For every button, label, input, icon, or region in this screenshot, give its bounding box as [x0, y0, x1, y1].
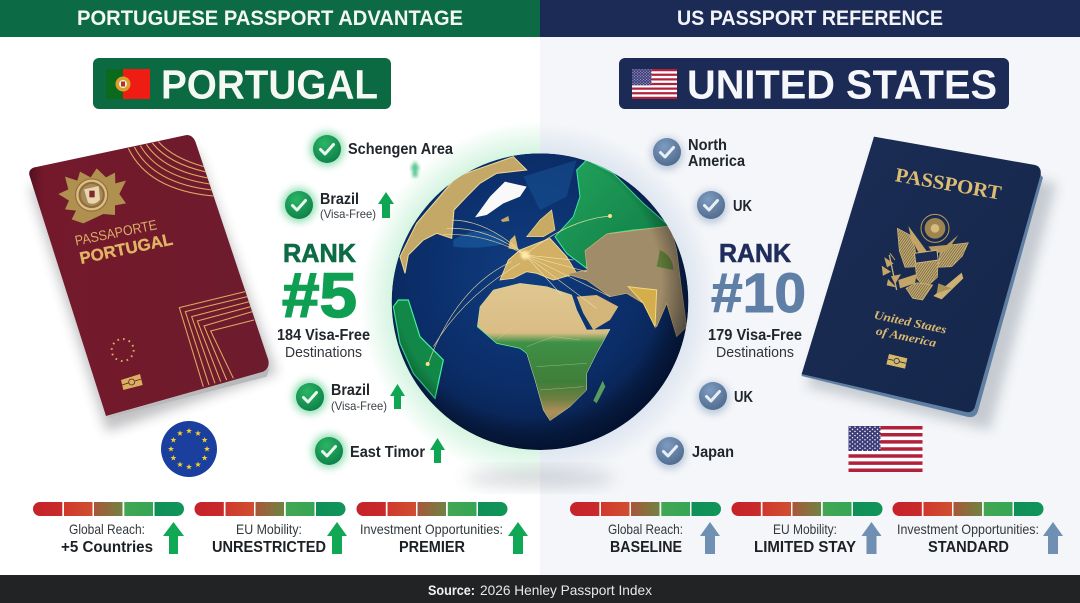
benefit: Schengen Area: Schengen Area [348, 141, 453, 158]
flight arcs [428, 216, 610, 363]
benefit: Brazil visa-free lower: (Visa-Free) [331, 399, 387, 413]
icon: EU flag [161, 421, 217, 477]
icon: biometric chip [121, 374, 143, 390]
benefit: North America [651, 137, 745, 170]
header: Portuguese passport advantage [0, 0, 540, 37]
land: South America [393, 300, 443, 398]
benefit: Brazil visa-free upper: (Visa-Free) [320, 207, 376, 221]
metric: EU Mobility Portugal [194, 502, 347, 556]
passport: Portugal: PORTUGAL [78, 230, 174, 268]
metric: Investment Opportunities US: STANDARD [928, 539, 1009, 556]
rank block: United States: #10 [711, 261, 806, 324]
decorative gold arcs [128, 142, 254, 387]
metric: EU Mobility US [732, 502, 882, 556]
icon: small faded arrow [410, 161, 420, 177]
benefit: Brazil visa-free upper [282, 188, 394, 222]
metric: EU Mobility US: EU Mobility: [773, 521, 837, 537]
icon: coat of arms [58, 168, 126, 223]
land: Europe [500, 238, 577, 280]
icon: EU star ring [112, 339, 134, 361]
benefit: North America: America [688, 153, 745, 170]
metric: Global Reach US: Global Reach: [608, 521, 683, 537]
benefit: Brazil visa-free lower [293, 380, 405, 414]
rank block: Portugal: 184 Visa-Free [277, 327, 370, 344]
benefit: Brazil visa-free upper: Brazil [320, 191, 359, 208]
badge: United States: UNITED STATES [687, 62, 997, 108]
passport: Portugal: PASSAPORTE [73, 216, 158, 249]
badge: Portugal: PORTUGAL [161, 62, 378, 108]
land: Africa [477, 283, 610, 421]
passport: Portugal [29, 135, 277, 432]
metric: EU Mobility Portugal: EU Mobility: [236, 521, 302, 537]
benefit: Japan [654, 437, 734, 469]
icon: biometric chip [886, 354, 907, 369]
benefit: Brazil visa-free lower: Brazil [331, 382, 370, 399]
metric: Investment Opportunities US: Investment Opportunities: [897, 521, 1039, 537]
benefit: UK upper: UK [733, 198, 753, 215]
rank block: Portugal [277, 238, 370, 361]
badge: Portugal [93, 58, 391, 109]
metric: Global Reach Portugal: +5 Countries [61, 539, 153, 556]
metric: Investment Opportunities Portugal: PREMIER [399, 539, 465, 556]
benefit: UK upper [695, 191, 753, 223]
icon: US flag [632, 69, 677, 99]
header: US passport reference: US PASSPORT REFERENCE [677, 7, 943, 30]
benefit: North America: North [688, 137, 727, 154]
icon: Portugal flag [106, 69, 150, 99]
footer: source: Source: [428, 582, 475, 598]
header: US passport reference [540, 0, 1080, 37]
passport: United States: of America [875, 324, 938, 350]
metric: Investment Opportunities Portugal [356, 502, 528, 556]
background: right panel [540, 37, 1080, 575]
benefit: Schengen Area [310, 132, 453, 166]
metric: Global Reach US: BASELINE [610, 539, 682, 556]
land: North America [400, 157, 527, 273]
rank block: United States: Destinations [716, 344, 794, 361]
land: Greenland [475, 182, 527, 217]
benefit: UK lower: UK [734, 389, 754, 406]
rank block: Portugal: #5 [282, 261, 357, 331]
passport: United States: PASSPORT [893, 164, 1004, 205]
benefit: East Timor: East Timor [350, 444, 425, 461]
rank block: Portugal: RANK [283, 238, 356, 268]
benefit: UK lower [697, 382, 754, 414]
rank block: United States [708, 238, 806, 361]
footer: source [0, 575, 1080, 603]
header: Portuguese passport advantage: PORTUGUESE PASSPORT ADVANTAGE [77, 7, 463, 30]
metric: Global Reach US [570, 502, 721, 556]
metric: Global Reach Portugal [33, 502, 184, 556]
passport: United States: United States [873, 308, 948, 337]
icon: US flag large [848, 426, 922, 472]
metric: EU Mobility Portugal: UNRESTRICTED [212, 539, 326, 556]
land: Arabia [577, 295, 618, 330]
metric: EU Mobility US: LIMITED STAY [754, 539, 856, 556]
metric: Global Reach Portugal: Global Reach: [69, 521, 145, 537]
globe [392, 153, 688, 450]
rank block: United States: RANK [719, 238, 791, 268]
land: Russia [555, 160, 670, 268]
background: left panel [0, 37, 540, 575]
metric: Investment Opportunities Portugal: Investment Opportunities: [360, 521, 503, 537]
metric: Investment Opportunities US [892, 502, 1063, 556]
benefit: Japan: Japan [692, 444, 734, 461]
rank block: United States: 179 Visa-Free [708, 327, 802, 344]
land: Asia [567, 226, 687, 337]
rank block: Portugal: Destinations [285, 344, 362, 361]
benefit: East Timor [312, 434, 445, 468]
icon: great seal eagle [882, 214, 968, 300]
passport: United States [802, 137, 1057, 430]
footer: source: 2026 Henley Passport Index [480, 582, 652, 598]
